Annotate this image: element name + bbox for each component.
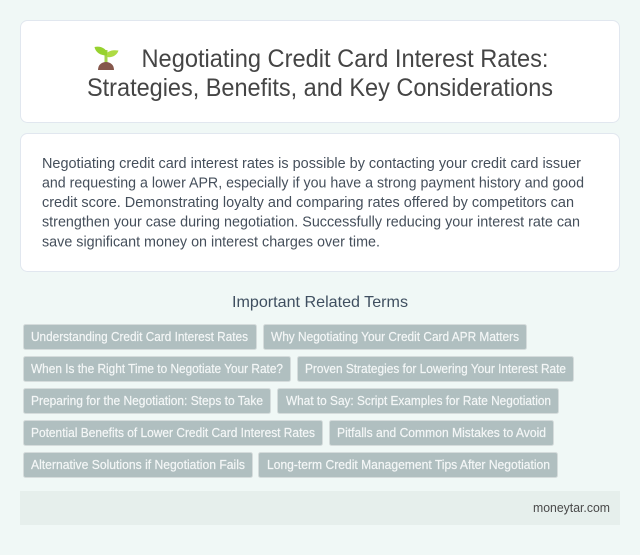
tag list <box>24 324 574 478</box>
summary paragraph: save significant money on interest charges over time. <box>42 234 380 250</box>
tag <box>258 452 558 478</box>
tag <box>24 452 252 478</box>
panel: title card <box>20 20 620 122</box>
heading: related terms: Important Related Terms <box>232 294 408 311</box>
tag: Understanding Credit Card Interest Rates <box>31 330 248 344</box>
summary paragraph <box>42 156 584 250</box>
tag <box>298 356 574 382</box>
tag: Why Negotiating Your Credit Card APR Matters <box>271 330 519 344</box>
summary paragraph: credit score. Demonstrating loyalty and comparing rates offered by competitors can <box>42 195 574 211</box>
tag <box>24 388 270 414</box>
title <box>87 45 553 102</box>
tag: Preparing for the Negotiation: Steps to Take <box>31 394 263 408</box>
icon: seedling <box>94 47 118 70</box>
summary paragraph: Negotiating credit card interest rates is possible by contacting your credit card issuer <box>42 156 581 172</box>
title: Negotiating Credit Card Interest Rates: <box>142 45 548 73</box>
tag <box>24 356 290 382</box>
tag <box>330 420 554 446</box>
title: Strategies, Benefits, and Key Considerations <box>87 74 553 102</box>
tag: Potential Benefits of Lower Credit Card Interest Rates <box>31 426 315 440</box>
tag: What to Say: Script Examples for Rate Negotiation <box>286 394 551 408</box>
summary paragraph: and requesting a lower APR, especially if you have a strong payment history and good <box>42 176 584 192</box>
footer bar <box>20 491 620 525</box>
tag: Proven Strategies for Lowering Your Interest Rate <box>305 362 566 376</box>
tag <box>264 324 526 350</box>
tag <box>24 420 322 446</box>
footer source: moneytar.com <box>533 501 610 515</box>
tag: Long-term Credit Management Tips After Negotiation <box>267 458 550 472</box>
tag: When Is the Right Time to Negotiate Your Rate? <box>31 362 283 376</box>
tag: Pitfalls and Common Mistakes to Avoid <box>337 426 546 440</box>
tag <box>24 324 256 350</box>
tag: Alternative Solutions if Negotiation Fails <box>31 458 245 472</box>
panel: summary text <box>20 134 620 272</box>
summary paragraph: strengthen your case during negotiation. Successfully reducing your interest rate can <box>42 214 580 230</box>
tag <box>278 388 558 414</box>
